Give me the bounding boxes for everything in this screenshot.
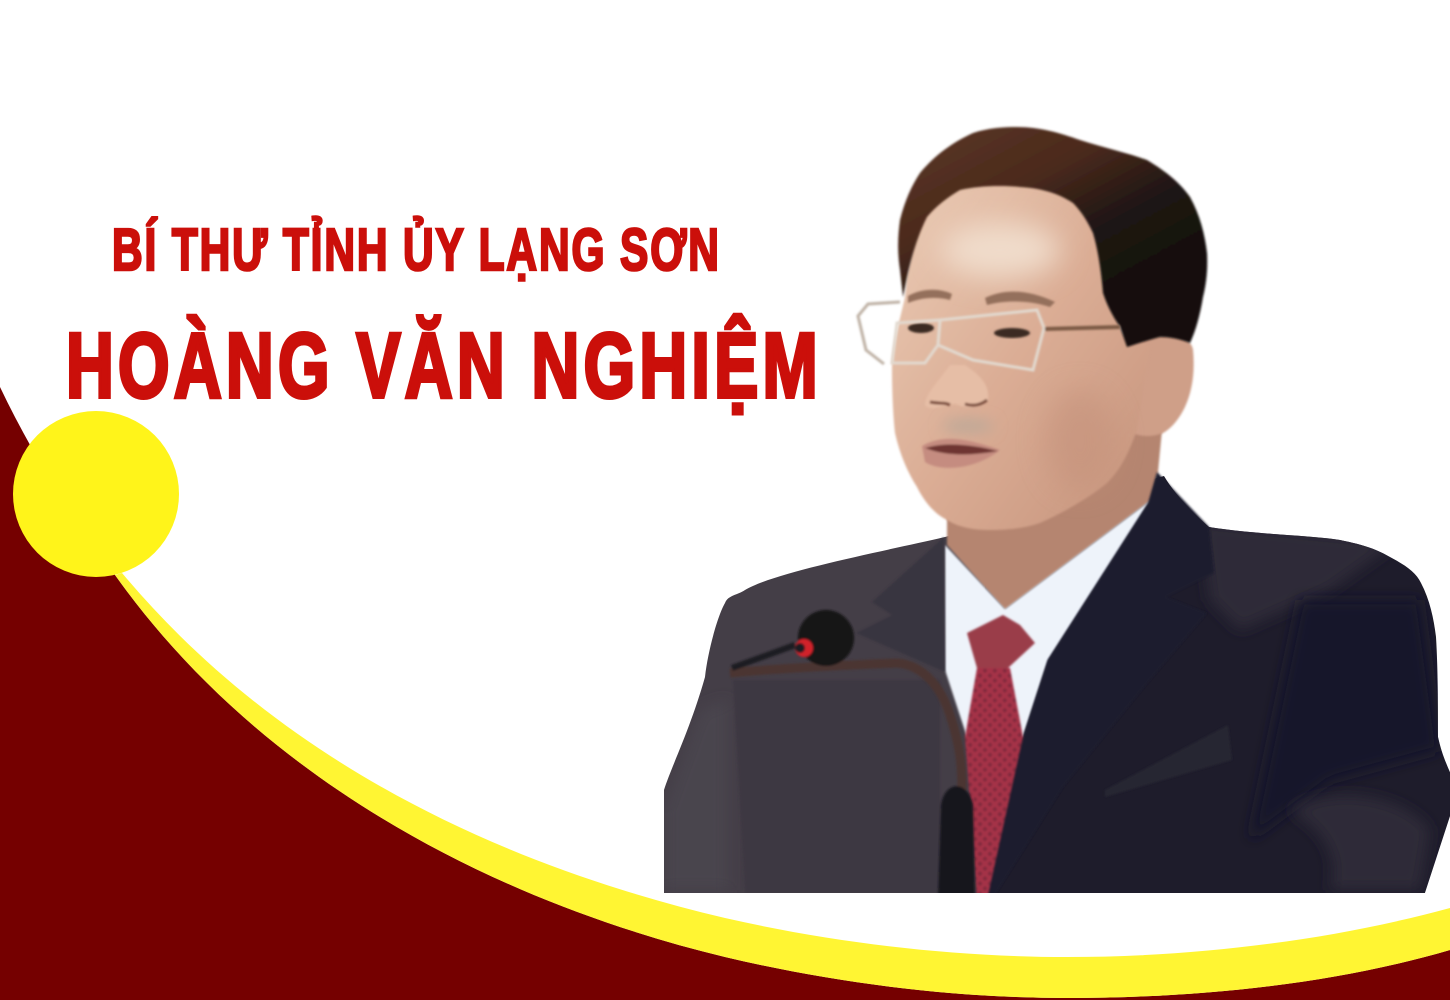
eyebrows bbox=[908, 290, 1055, 307]
yellow circle bbox=[13, 411, 179, 577]
moustache shadow bbox=[942, 419, 994, 433]
eyes bbox=[908, 323, 1030, 338]
shirt collar bbox=[945, 500, 1151, 737]
name heading: HOÀNG VĂN NGHIỆM bbox=[66, 313, 818, 417]
neck bbox=[947, 415, 1162, 610]
left lapel bbox=[856, 537, 945, 672]
shoulder tone bbox=[1207, 526, 1388, 626]
face bbox=[892, 170, 1150, 530]
necktie bbox=[965, 615, 1035, 900]
dark red swoosh bbox=[0, 387, 1450, 1000]
nose bbox=[925, 365, 988, 408]
arm shadow bbox=[1250, 600, 1440, 840]
hair bbox=[898, 127, 1207, 347]
cheek shading bbox=[1058, 407, 1093, 460]
lectern panel bbox=[736, 696, 740, 777]
yellow swoosh bbox=[115, 573, 1450, 998]
mouth bbox=[922, 439, 1000, 468]
breast pocket bbox=[1105, 725, 1232, 797]
left sleeve bbox=[678, 714, 694, 752]
portrait of Hoàng Văn Nghiệm bbox=[660, 127, 1450, 900]
subtitle: BÍ THƯ TỈNH ỦY LẠNG SƠN bbox=[112, 216, 719, 283]
ear bbox=[1136, 336, 1196, 436]
right lapel bbox=[1022, 471, 1214, 738]
arm folds bbox=[1290, 795, 1430, 890]
forehead highlight bbox=[940, 222, 1060, 278]
glasses bbox=[858, 302, 1120, 370]
microphone bbox=[730, 610, 975, 900]
suit jacket bbox=[660, 470, 1450, 900]
